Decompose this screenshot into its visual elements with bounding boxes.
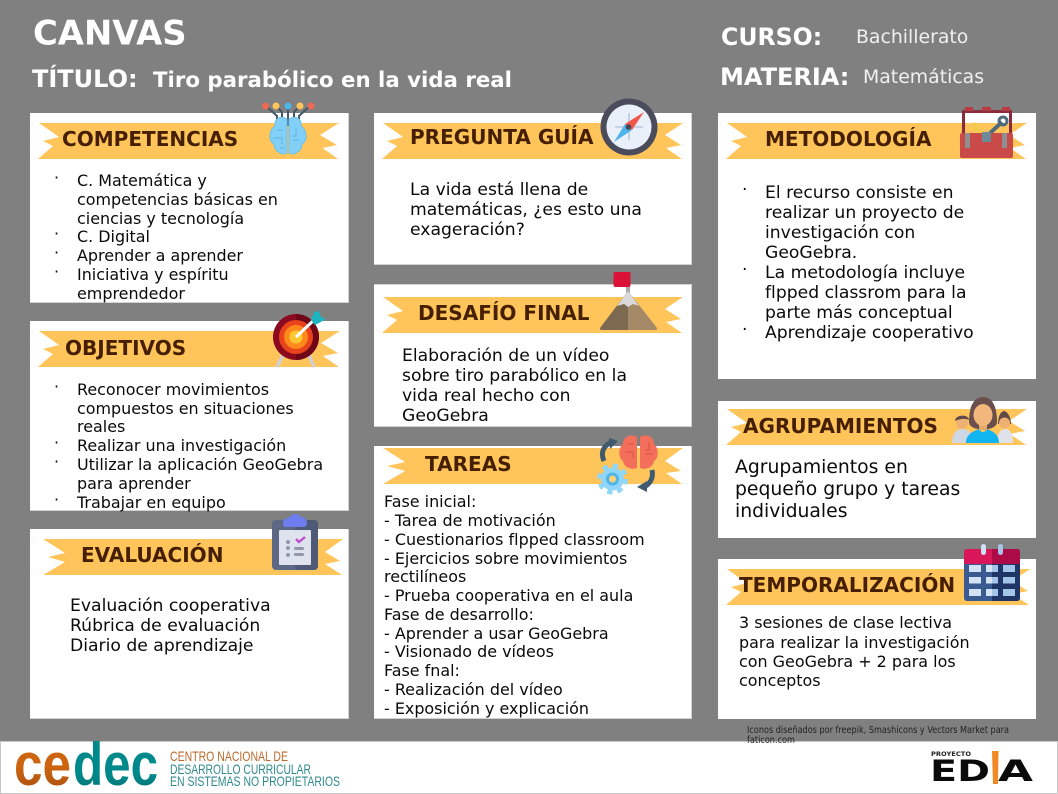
text: agrupamientos: individuales — [735, 501, 848, 522]
panel: desafío final — [374, 272, 692, 427]
text: tareas — [384, 492, 645, 718]
icon: brain and gear cycle — [600, 435, 658, 492]
logo text: centro nacional: CENTRO NACIONAL DE — [170, 748, 288, 764]
banner: pregunta guía — [382, 123, 683, 159]
text: tareas: - Exposición y explicación — [384, 699, 589, 718]
text: evaluación: Diario de aprendizaje — [70, 636, 254, 656]
panel: evaluación — [30, 514, 349, 719]
icon: brain — [262, 102, 314, 154]
text: evaluación: Rúbrica de evaluación — [70, 616, 260, 636]
list: metodología: La metodología incluye — [765, 263, 965, 283]
text: tareas: Fase fnal: — [384, 661, 460, 680]
list: objetivos: Trabajar en equipo — [76, 493, 226, 512]
text: evaluación — [70, 596, 271, 656]
panel: pregunta guía — [374, 98, 692, 265]
text: pregunta guía — [410, 180, 642, 240]
banner: objetivos — [38, 331, 340, 367]
subject label: Matemáticas — [863, 67, 984, 88]
list: competencias: ciencias y tecnología — [77, 209, 244, 228]
list: competencias: · — [54, 224, 59, 243]
list: metodología: El recurso consiste en — [765, 183, 954, 203]
icon: compass — [600, 98, 658, 156]
list: competencias — [54, 168, 278, 303]
text: tareas: Fase inicial: — [384, 492, 476, 511]
list: metodología: realizar un proyecto de — [765, 203, 964, 223]
list: metodología: GeoGebra. — [765, 243, 857, 263]
icon: toolbox — [960, 107, 1013, 158]
icon: target — [273, 311, 326, 367]
list: metodología: · — [742, 320, 747, 340]
panel: tareas — [374, 435, 692, 719]
panel: agrupamientos — [718, 397, 1036, 538]
list: metodología: investigación con — [765, 223, 915, 243]
list: metodología: flpped classrom para la — [765, 283, 966, 303]
heading: tareas: TAREAS — [425, 452, 512, 476]
subtitle: título — [32, 64, 512, 93]
text: pregunta guía: matemáticas, ¿es esto una — [410, 200, 642, 220]
banner: agrupamientos — [726, 409, 1027, 445]
text: temporalización: 3 sesiones de clase lectiva — [739, 613, 952, 632]
course label — [721, 23, 968, 51]
heading: temporalización: TEMPORALIZACIÓN — [739, 573, 955, 597]
logo: proyecto edia: ED — [930, 754, 990, 788]
text: desafío final: vida real hecho con — [402, 386, 571, 406]
list: competencias: C. Matemática y — [77, 171, 207, 190]
subtitle: título: TÍTULO: — [32, 64, 138, 93]
list: competencias: · — [54, 168, 59, 187]
list: metodología: parte más conceptual — [765, 303, 953, 323]
list: objetivos: · — [54, 377, 59, 396]
list: competencias: competencias básicas en — [77, 190, 278, 209]
logo: proyecto edia: PROYECTO — [931, 751, 971, 758]
list: competencias: Iniciativa y espíritu — [77, 265, 229, 284]
banner: metodología — [726, 123, 1027, 159]
text: desafío final: sobre tiro parabólico en la — [402, 366, 627, 386]
text: temporalización — [739, 613, 970, 690]
text: agrupamientos: pequeño grupo y tareas — [735, 479, 960, 500]
text: temporalización: conceptos — [739, 671, 821, 690]
icon: people — [952, 397, 1013, 443]
list: objetivos: Reconocer movimientos — [77, 380, 269, 399]
list: competencias: Aprender a aprender — [77, 246, 243, 265]
list: competencias: emprendedor — [77, 284, 185, 303]
text: desafío final: GeoGebra — [402, 406, 489, 426]
subject label: MATERIA: — [720, 63, 849, 91]
text: tareas: - Tarea de motivación — [384, 511, 556, 530]
text: pregunta guía: exageración? — [410, 220, 525, 240]
banner: temporalización — [726, 569, 1030, 605]
list: objetivos: · — [54, 433, 59, 452]
text: temporalización: con GeoGebra + 2 para los — [739, 652, 956, 671]
list: metodología — [742, 180, 974, 343]
logo text: centro nacional: DESARROLLO CURRICULAR — [170, 761, 311, 777]
logo: proyecto edia — [930, 751, 1034, 788]
credits note — [747, 725, 1009, 746]
list: objetivos: Realizar una investigación — [77, 436, 286, 455]
logo: cedec — [14, 731, 158, 794]
list: objetivos: · — [54, 490, 59, 509]
heading: agrupamientos: AGRUPAMIENTOS — [743, 414, 938, 438]
subject label — [720, 63, 984, 91]
footer bar — [0, 731, 1058, 794]
text: tareas: - Aprender a usar GeoGebra — [384, 624, 609, 643]
course label: CURSO: — [721, 23, 822, 51]
list: metodología: · — [742, 180, 747, 200]
text: tareas: - Visionado de vídeos — [384, 642, 554, 661]
text: tareas: Fase de desarrollo: — [384, 605, 534, 624]
list: competencias: · — [54, 243, 59, 262]
list: objetivos — [54, 377, 323, 512]
text: desafío final — [402, 346, 627, 426]
panel: temporalización — [718, 544, 1036, 719]
text: tareas: rectilíneos — [384, 567, 466, 586]
text: temporalización: para realizar la investigación — [739, 633, 970, 652]
list: metodología: Aprendizaje cooperativo — [765, 323, 974, 343]
icon: clipboard — [272, 514, 318, 570]
list: objetivos: reales — [77, 417, 125, 436]
logo text: centro nacional — [170, 748, 340, 789]
text: tareas: - Realización del vídeo — [384, 680, 563, 699]
text: desafío final: Elaboración de un vídeo — [402, 346, 609, 366]
panel: objetivos — [30, 311, 349, 512]
course label: Bachillerato — [856, 27, 968, 48]
icon: mountain flag — [600, 272, 657, 330]
text: tareas: - Cuestionarios flpped classroom — [384, 530, 645, 549]
text: agrupamientos: Agrupamientos en — [735, 457, 908, 478]
banner: evaluación — [43, 539, 343, 575]
icon: calendar — [964, 544, 1020, 601]
text: tareas: - Ejercicios sobre movimientos — [384, 549, 627, 568]
logo: proyecto edia: A — [998, 754, 1034, 788]
subtitle: título: Tiro parabólico en la vida real — [153, 68, 512, 93]
list: objetivos: Utilizar la aplicación GeoGebra — [77, 455, 323, 474]
heading: competencias: COMPETENCIAS — [62, 127, 238, 151]
list: objetivos: · — [54, 452, 59, 471]
banner: competencias — [38, 123, 339, 159]
list: competencias: C. Digital — [77, 227, 150, 246]
logo text: centro nacional: EN SISTEMAS NO PROPIETARIOS — [170, 773, 340, 789]
list: objetivos: para aprender — [77, 474, 191, 493]
list: competencias: · — [54, 262, 59, 281]
credits note: Iconos diseñados por freepik, Smashicons y Vectors Market para — [747, 725, 1009, 736]
list: metodología: · — [742, 260, 747, 280]
panel: metodología — [718, 107, 1036, 379]
heading: desafío final: DESAFÍO FINAL — [418, 301, 590, 325]
banner: desafío final — [382, 297, 683, 333]
banner: tareas — [383, 448, 683, 484]
text: tareas: - Prueba cooperativa en el aula — [384, 586, 633, 605]
panel: competencias — [30, 102, 349, 303]
heading: evaluación: EVALUACIÓN — [81, 543, 223, 567]
text: evaluación: Evaluación cooperativa — [70, 596, 271, 616]
text: pregunta guía: La vida está llena de — [410, 180, 588, 200]
heading: objetivos: OBJETIVOS — [65, 336, 186, 360]
heading: pregunta guía: PREGUNTA GUÍA — [410, 125, 594, 149]
heading: metodología: METODOLOGÍA — [765, 127, 932, 151]
list: objetivos: compuestos en situaciones — [77, 399, 294, 418]
credits note: faticon.com — [747, 735, 795, 746]
text: agrupamientos — [735, 457, 960, 522]
title: CANVAS — [33, 14, 187, 52]
